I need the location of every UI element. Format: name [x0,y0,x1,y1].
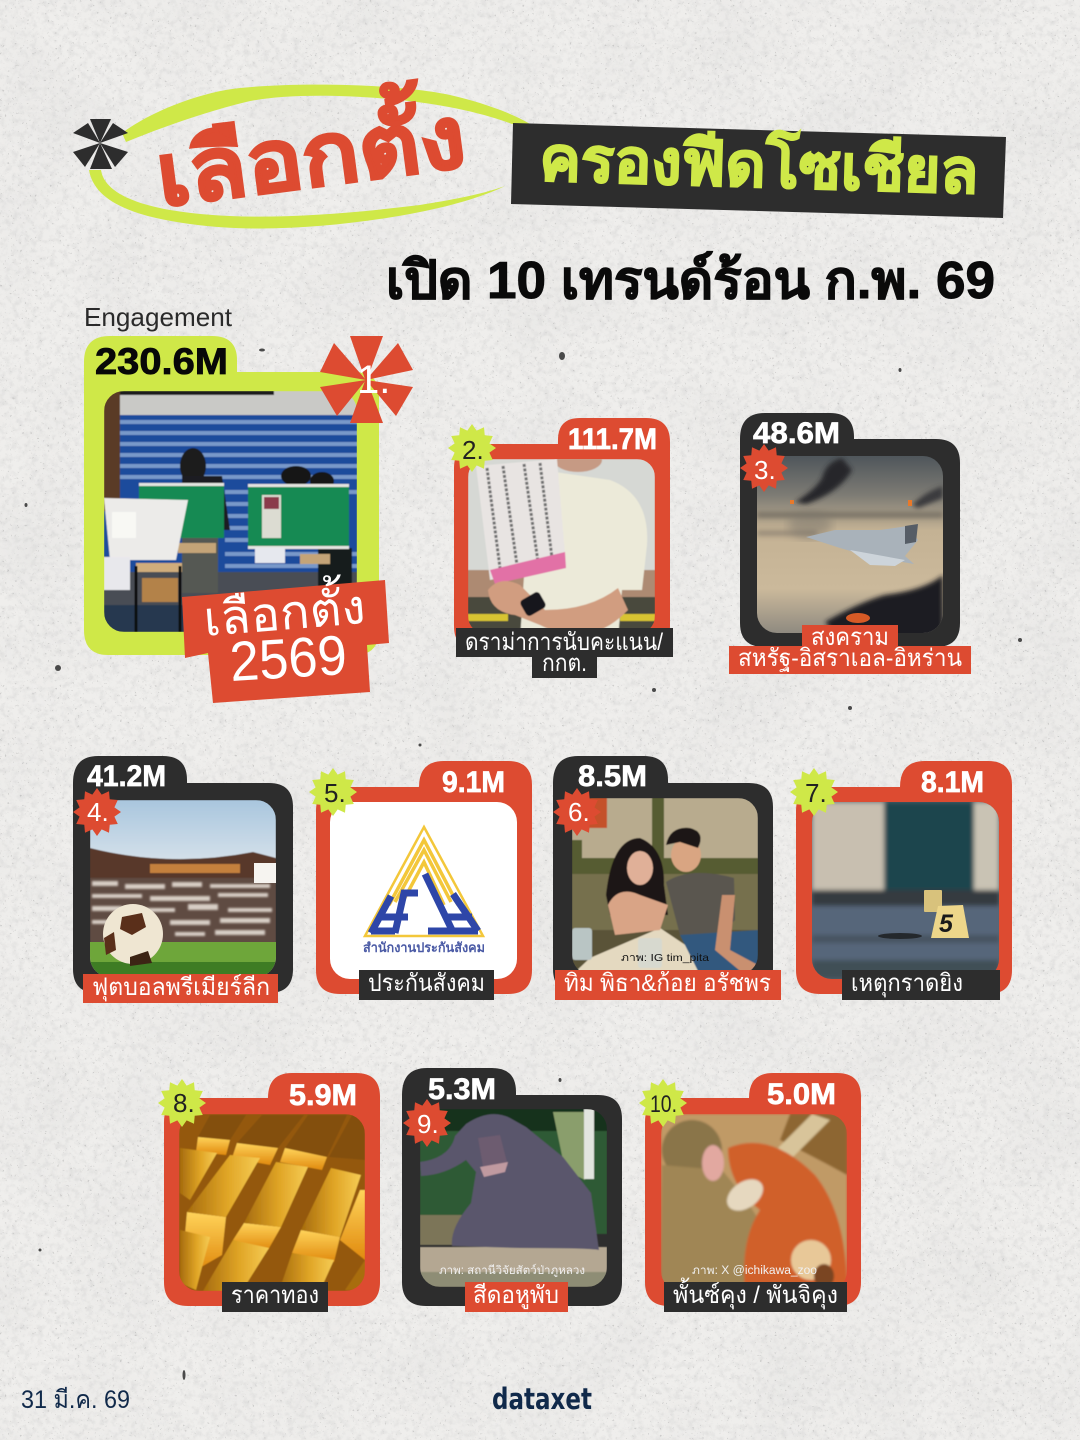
rank number 3: 3. [754,455,776,485]
label text: เหตุกราดยิง [851,970,963,998]
brand logo: dataxet [492,1382,592,1416]
rank number 6: 6. [568,797,590,827]
label text: ฟุตบอลพรีเมียร์ลีก [92,973,270,1002]
rank number 10: 10. [650,1091,677,1118]
label [842,970,1000,1000]
label text 1: ดราม่าการนับคะแนน/ [465,629,663,656]
value: 48.6M [753,417,840,450]
rank badge 2 [448,424,496,472]
card 3: war [729,413,971,674]
subtitle: เปิด 10 เทรนด์ร้อน ก.พ. 69 [386,251,995,310]
value: 230.6M [95,341,228,382]
card 1: election 2569 [84,336,413,703]
rank badge 5 [309,768,357,816]
rank burst 1 [320,336,413,423]
value: 5.9M [289,1079,357,1112]
title group [73,73,1006,228]
value: 8.5M [578,760,647,793]
value: 9.1M [442,766,505,799]
rank number 9: 9. [417,1109,439,1139]
logo panel [330,802,517,979]
value: 41.2M [87,760,166,793]
date: 31 มี.ค. 69 [21,1386,130,1414]
photo: monkey hugging plush toy [661,1114,847,1291]
photo: polling booths [104,391,357,632]
rank number 2: 2. [462,435,484,465]
label text 2: กกต. [542,650,587,677]
label line 2 [729,646,971,674]
title word: election: เลือกตั้ง [149,73,471,225]
frame [796,761,1012,994]
frame [316,761,532,994]
label text 2: สหรัฐ-อิสราเอล-อิหร่าน [738,645,962,672]
label [359,970,494,1000]
label line 1 [456,628,673,657]
label: election: เลือกตั้ง [201,572,367,647]
label text 1: สงคราม [811,624,889,651]
rank badge 8 [158,1079,206,1127]
card 5: social security [309,761,532,1000]
label [664,1282,847,1312]
frame [73,756,293,993]
label [555,970,781,1000]
card 2: vote count drama [448,418,673,678]
logo: social security office [363,827,485,955]
label text: ทิม พิธา&ก้อย อรัชพร [564,970,771,997]
evidence marker number: 5 [939,910,954,938]
photo: stadium and football [90,800,276,977]
photo: man holding ballot [468,459,655,628]
label [465,1282,568,1312]
card 6: Tim Pita and Koi Aratchaporn [553,756,781,1000]
photo credit: ภาพ: IG tim_pita [621,952,709,964]
frame [740,413,960,647]
card 9: elephant Si Do Hu Phap [402,1068,622,1312]
photo: fighter jet and smoke [757,456,943,640]
photo credit: ภาพ: X @ichikawa_zoo [692,1265,817,1277]
label text: ราคาทอง [231,1282,319,1309]
black banner [511,123,1006,218]
rank badge 6 [553,788,601,836]
frame [454,418,670,650]
rank badge 9 [403,1099,451,1147]
logo caption: สำนักงานประกันสังคม [363,940,485,955]
rank number 5: 5. [324,778,346,808]
frame [553,756,773,993]
rank number 4: 4. [87,797,109,827]
value: 8.1M [921,766,984,799]
card 8: gold price [158,1073,380,1312]
engagement caption: Engagement [84,302,233,332]
label: 2569: 2569 [228,623,349,693]
photo credit: ภาพ: สถานีวิจัยสัตว์ป่าภูหลวง [439,1263,585,1277]
red name tag [182,580,389,703]
value: 5.3M [428,1073,496,1106]
value: 5.0M [767,1078,836,1111]
card 4: premier league [73,756,293,1003]
label text: พั้นซ์คุง / พันจิคุง [673,1277,838,1310]
rank badge 10 [639,1079,687,1127]
frame [402,1068,622,1306]
label text: ประกันสังคม [368,970,485,997]
frame [164,1073,380,1306]
label line 2 [532,657,597,678]
photo: gold bars [179,1114,365,1291]
photo: evidence markers on pavement [812,802,999,979]
value: 111.7M [568,423,657,456]
rank number 7: 7. [805,778,827,808]
card 7: mass shooting [790,761,1012,1000]
frame [645,1073,861,1306]
rank number 8: 8. [173,1088,195,1118]
title words: dominate social feed: ครองฟีดโซเชียล [539,122,980,207]
rank badge 4 [73,788,121,836]
label text: สีดอหูพับ [473,1282,559,1310]
photo: elephant in river [420,1109,607,1287]
rank number 1: 1. [357,358,390,402]
label [222,1282,328,1312]
label [83,974,278,1003]
rank badge 3 [740,444,788,492]
hand-drawn lime oval [89,85,530,228]
photo: couple on a sofa [572,798,758,975]
rank badge 7 [790,768,838,816]
icon: black asterisk [73,119,128,169]
frame [84,336,379,655]
label line 1 [802,625,898,646]
card 10: Punch-kun monkey [639,1073,861,1312]
